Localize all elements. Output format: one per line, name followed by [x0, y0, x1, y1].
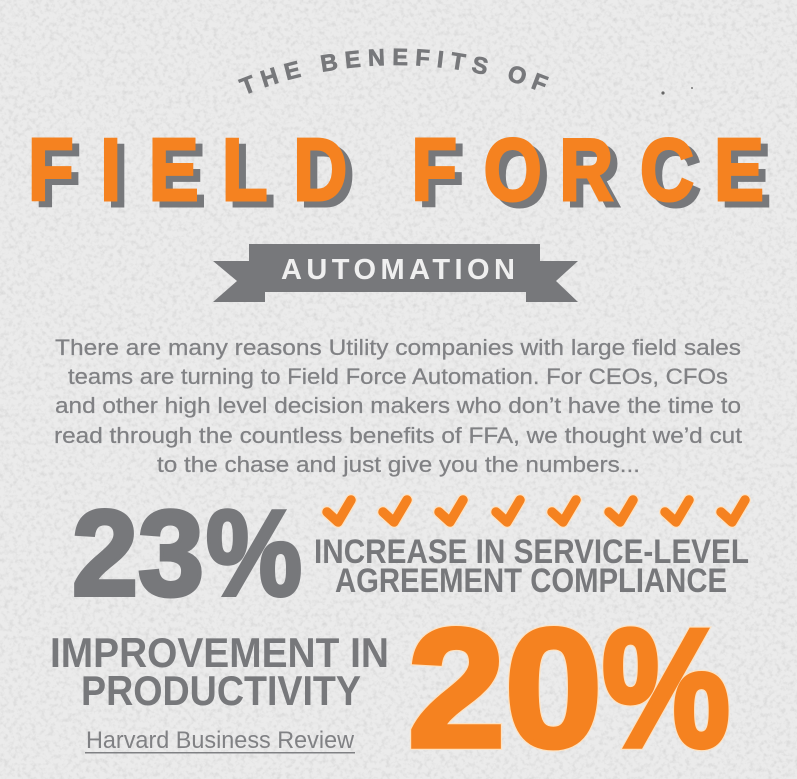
stat: 23 percent [72, 485, 302, 621]
title: field force: FIELD FORCE [35, 127, 771, 225]
intro paragraph: read through the countless benefits of FFA, we thought we’d cut [54, 423, 743, 448]
stat: 20 percent: 20 [408, 594, 602, 779]
banner right tail [526, 261, 578, 302]
text: improvement in productivity [50, 629, 389, 714]
banner label: AUTOMATION [281, 254, 515, 286]
stat: 20 percent: % [602, 594, 730, 779]
stat: 23 percent: % [206, 485, 302, 621]
text: improvement in productivity: IMPROVEMENT IN [50, 629, 389, 676]
stat: 23 percent: 23 [72, 485, 204, 621]
banner left tail [213, 261, 265, 302]
banner body [249, 244, 540, 292]
stat: 20 percent: % [602, 594, 730, 779]
row of check marks [327, 500, 745, 522]
banner: automation [213, 244, 578, 302]
intro paragraph: and other high level decision makers who don’t have the time to [55, 393, 741, 418]
source: harvard business review: Harvard Business Review [86, 727, 355, 754]
title: field force: FIELD FORCE [28, 121, 764, 219]
stat: 20 percent [408, 594, 730, 779]
text: improvement in productivity: PRODUCTIVITY [81, 667, 361, 714]
intro paragraph: to the chase and just give you the numbers... [157, 452, 640, 477]
heading: the benefits of: THE BENEFITS OF [238, 48, 549, 94]
text: increase in service-level agreement compliance: AGREEMENT COMPLIANCE [335, 562, 727, 600]
text: increase in service-level agreement compliance [314, 533, 749, 600]
stat: 20 percent: 20 [408, 594, 602, 779]
intro paragraph: teams are turning to Field Force Automation. For CEOs, CFOs [68, 364, 728, 389]
intro paragraph: There are many reasons Utility companies with large field sales [55, 335, 741, 360]
intro paragraph [54, 335, 743, 477]
